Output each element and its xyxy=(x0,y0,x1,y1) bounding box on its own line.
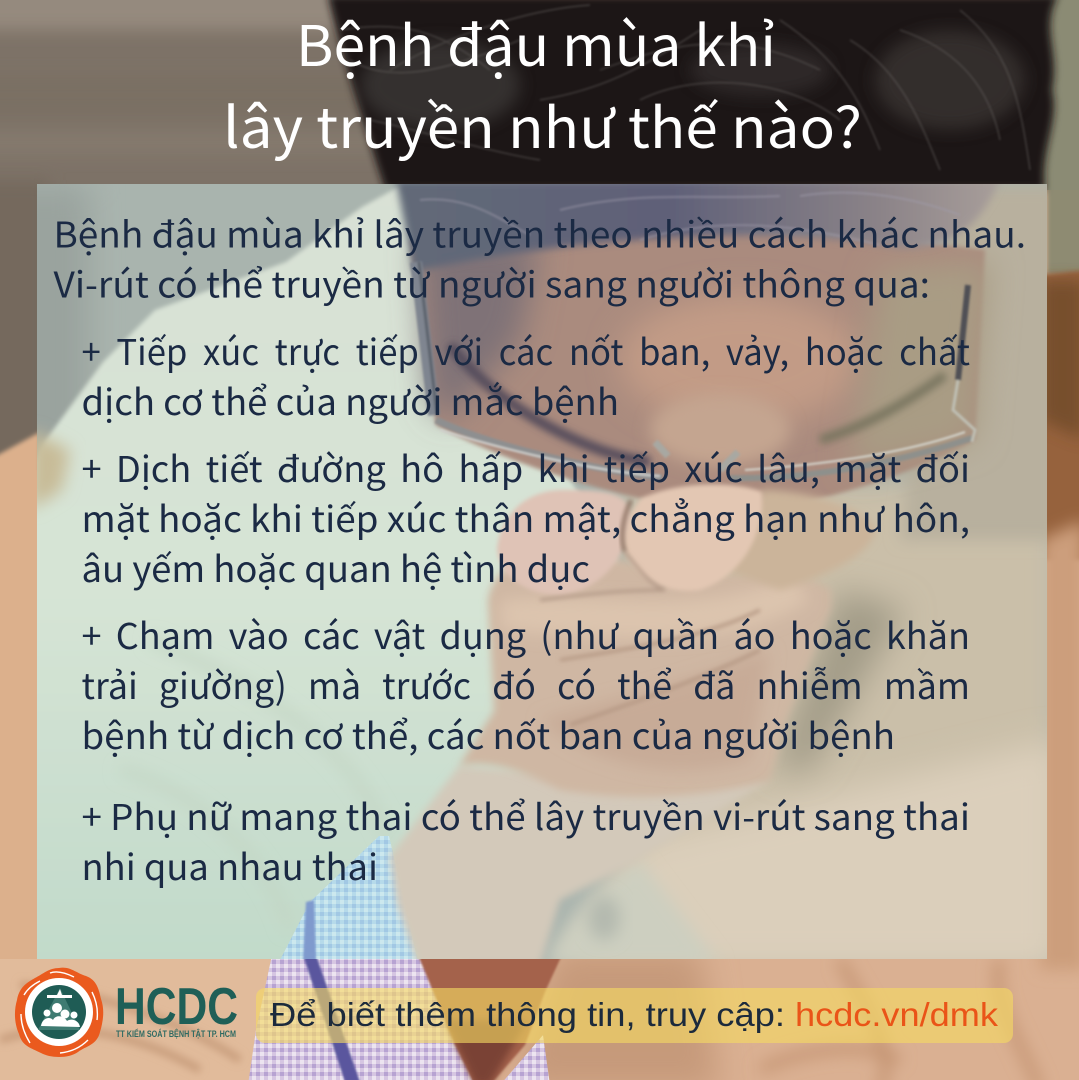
right sweater through card xyxy=(618,476,1047,842)
forearm xyxy=(390,766,770,965)
title: lây truyền như thế nào? xyxy=(223,84,862,165)
text block: touching contaminated items: + Chạm vào các vật dụng (như quần áo hoặc khăn xyxy=(82,609,970,660)
icon: HCDC logo emblem xyxy=(15,968,103,1057)
callout: link bar xyxy=(256,988,1013,1043)
text block: introduction xyxy=(54,208,1026,308)
text block: touching contaminated items: trải giường) mà trước đó có thể đã nhiễm mầm xyxy=(82,659,970,710)
glasses xyxy=(416,262,975,478)
text block: pregnancy transmission xyxy=(82,790,970,891)
hand xyxy=(459,552,831,797)
text block: introduction: Bệnh đậu mùa khỉ lây truyền theo nhiều cách khác nhau. xyxy=(54,208,1026,258)
title: Bệnh đậu mùa khỉ xyxy=(296,2,776,83)
text block: pregnancy transmission: nhi qua nhau thai xyxy=(82,840,378,891)
text block: touching contaminated items xyxy=(82,609,970,760)
hair through card xyxy=(396,180,1000,272)
text block: pregnancy transmission: + Phụ nữ mang thai có thể lây truyền vi-rút sang thai xyxy=(82,790,970,841)
text block: direct contact: dịch cơ thể của người mắc bệnh xyxy=(82,375,619,426)
face and forehead xyxy=(410,230,985,510)
text block: respiratory secretions xyxy=(82,442,970,593)
callout: link bar: Để biết thêm thông tin, truy cập: xyxy=(270,996,785,1033)
title xyxy=(223,2,862,165)
logo wordmark: HCDC xyxy=(115,978,238,1036)
text block: respiratory secretions: âu yếm hoặc quan hệ tình dục xyxy=(82,542,590,593)
text block: direct contact: + Tiếp xúc trực tiếp với các nốt ban, vảy, hoặc chất xyxy=(82,325,970,376)
callout: link bar: hcdc.vn/dmk xyxy=(795,996,999,1033)
text block: direct contact xyxy=(82,325,970,426)
shirt through card xyxy=(279,836,418,962)
text block: touching contaminated items: bệnh từ dịch cơ thể, các nốt ban của người bệnh xyxy=(82,709,895,760)
text block: respiratory secretions: mặt hoặc khi tiếp xúc thân mật, chẳng hạn như hôn, xyxy=(82,492,970,543)
logo wordmark: TT KIỂM SOÁT BỆNH TẬT TP. HCM xyxy=(116,1028,236,1040)
text block: respiratory secretions: + Dịch tiết đường hô hấp khi tiếp xúc lâu, mặt đối xyxy=(82,442,970,493)
text block: introduction: Vi-rút có thể truyền từ người sang người thông qua: xyxy=(54,258,930,308)
sweater seen through the card xyxy=(37,186,578,959)
panel: translucent text card over the photo xyxy=(0,180,1060,1000)
